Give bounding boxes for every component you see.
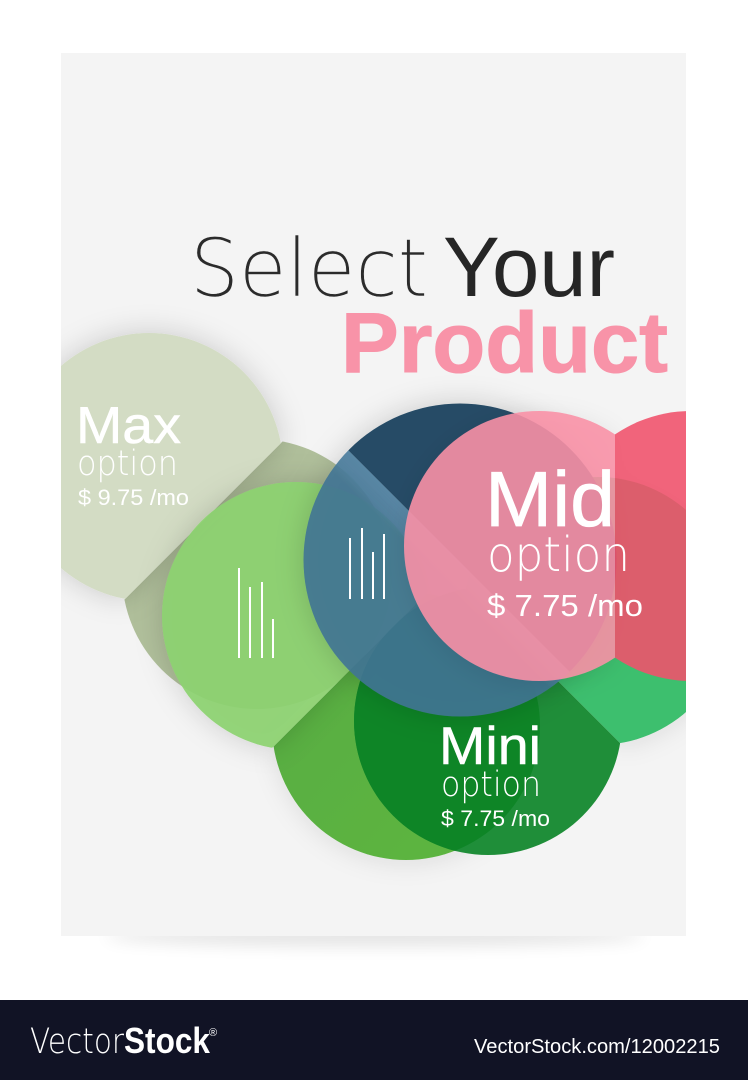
- footer logo: Vector: [30, 1022, 125, 1062]
- title: Select Your: Select: [190, 222, 428, 315]
- footer bar: [0, 1000, 748, 1080]
- mid option label: $ 7.75 /mo: [487, 588, 643, 623]
- mid option label: option: [487, 527, 630, 583]
- red fold circle: [615, 411, 686, 681]
- mini option circle: [354, 680, 620, 855]
- pink mid option circle: [404, 411, 615, 681]
- max option label: $ 9.75 /mo: [78, 485, 189, 510]
- mid green fold circle: [273, 604, 466, 868]
- light green bars icon: [238, 568, 274, 658]
- sage fold circle: [124, 442, 350, 686]
- blue circle bars icon: [349, 528, 385, 599]
- max option circle: [15, 333, 283, 601]
- footer logo: Stock: [124, 1020, 211, 1061]
- emerald fold circle: [558, 477, 686, 748]
- blue circle: [304, 404, 616, 716]
- mid option label: Mid: [485, 455, 615, 543]
- mini option label: [439, 717, 550, 831]
- circle cluster: [61, 322, 686, 868]
- footer stock id: VectorStock.com/12002215: [474, 1036, 720, 1058]
- page floor shadow: [105, 926, 645, 946]
- max option label: [76, 397, 189, 510]
- mini option label: option: [441, 765, 541, 805]
- title: Select Your: [190, 220, 615, 315]
- footer logo: ®: [209, 1027, 217, 1039]
- footer logo: [30, 1020, 217, 1062]
- mini option label: Mini: [439, 717, 541, 776]
- max option label: Max: [76, 397, 181, 455]
- title: Select Your: Your: [443, 220, 615, 314]
- max option label: option: [77, 444, 178, 484]
- title: Product: Product: [341, 296, 668, 391]
- mini option label: $ 7.75 /mo: [441, 806, 550, 831]
- poster background panel: [61, 53, 686, 936]
- light green circle: [162, 482, 430, 750]
- mid option label: [485, 455, 643, 623]
